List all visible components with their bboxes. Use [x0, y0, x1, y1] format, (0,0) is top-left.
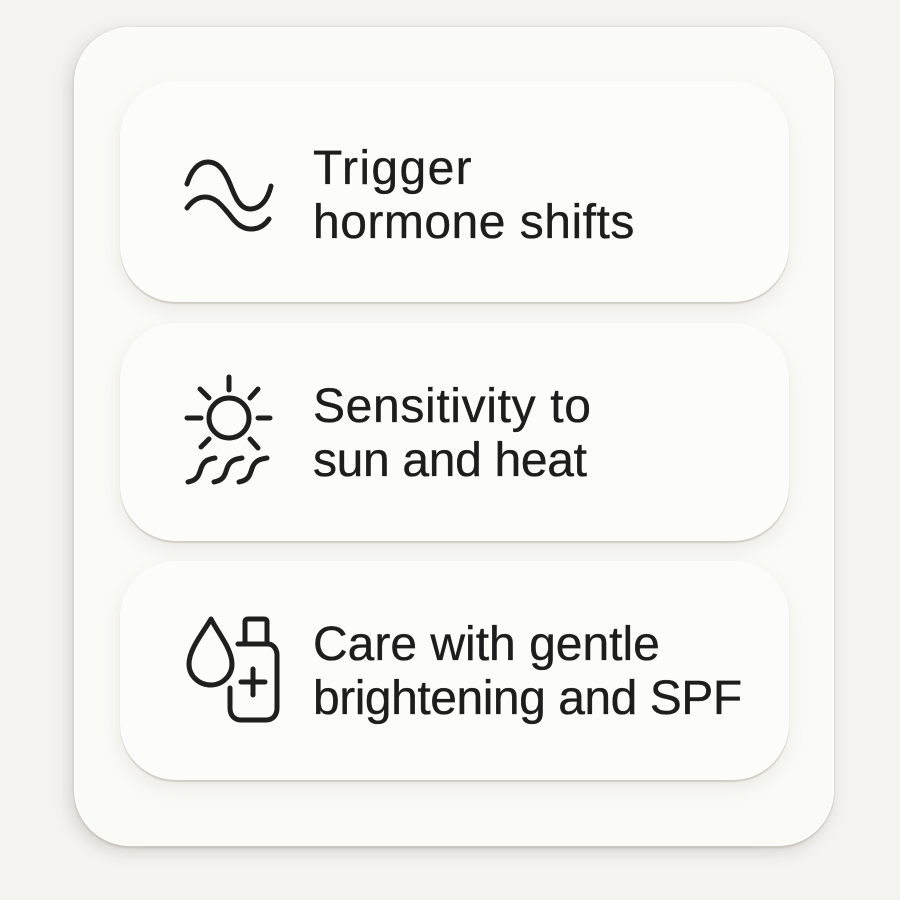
panel: outer backing card [74, 27, 834, 846]
icon: drop and bottle [186, 616, 280, 722]
text: care: brightening and SPF [313, 672, 742, 725]
icon: sun and heat [184, 374, 272, 484]
text: hormone shifts: Trigger [313, 142, 473, 195]
text: hormone shifts [313, 142, 635, 249]
text: care [313, 618, 742, 725]
text: sensitivity: Sensitivity to [313, 380, 592, 433]
panel: hormone card [120, 81, 789, 302]
text: hormone shifts: hormone shifts [313, 196, 635, 249]
icon: hormone waves [184, 160, 274, 232]
panel: sun card [120, 323, 789, 541]
text: sensitivity: sun and heat [313, 434, 587, 487]
text: care: Care with gentle [313, 618, 660, 671]
panel: care card [120, 561, 789, 780]
text: sensitivity [313, 380, 592, 487]
